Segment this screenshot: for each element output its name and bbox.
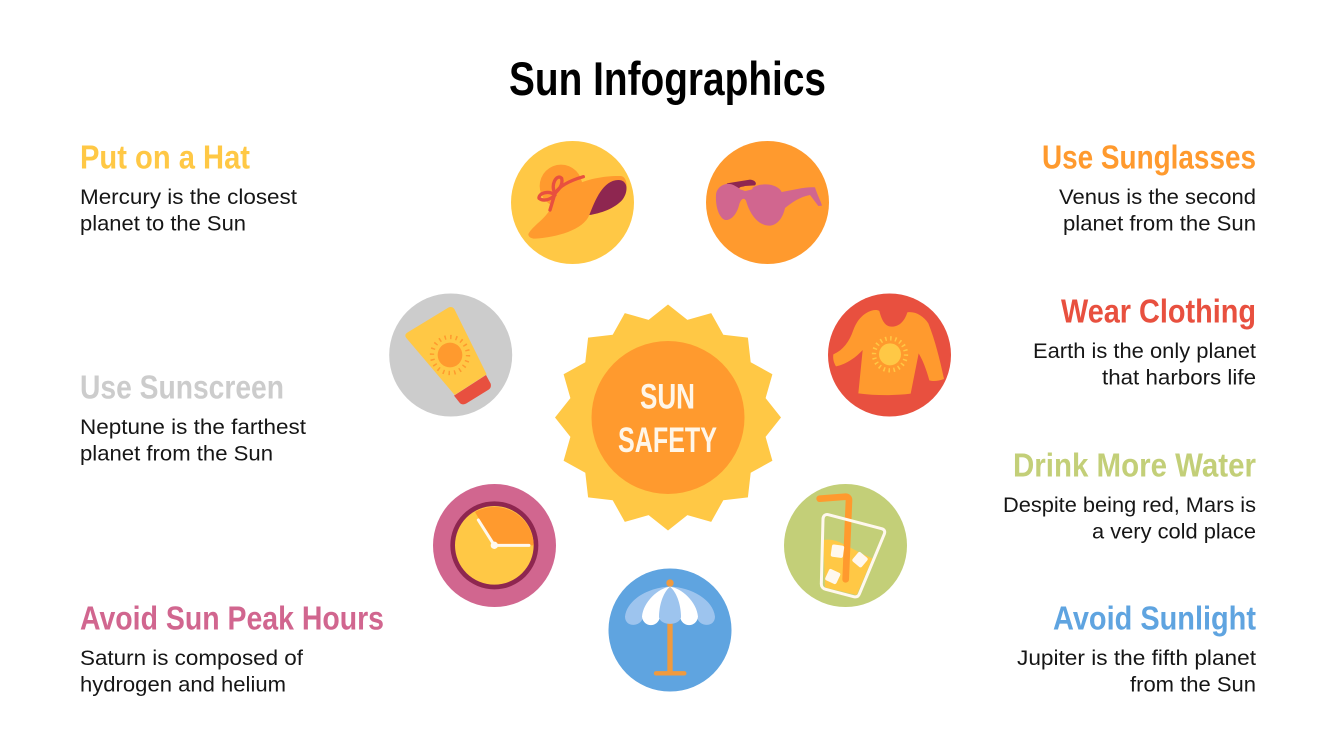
- title: Sun Infographics: [509, 52, 826, 105]
- text block: drink more water: a very cold place: [1092, 520, 1256, 544]
- text block: use sunscreen: Neptune is the farthest: [80, 416, 306, 439]
- text block: avoid sun peak hours: [80, 600, 384, 696]
- text block: use sunglasses: [1042, 138, 1256, 236]
- text block: drink more water: [1003, 446, 1256, 544]
- text block: put on a hat: [80, 138, 297, 236]
- text block: drink more water: Drink More Water: [1013, 446, 1256, 484]
- icon: sunglasses: [706, 141, 829, 264]
- text block: put on a hat: Mercury is the closest: [80, 186, 297, 209]
- text block: avoid sun peak hours: Avoid Sun Peak Hours: [80, 600, 384, 636]
- text block: use sunscreen: [80, 368, 306, 466]
- text block: wear clothing: Wear Clothing: [1061, 292, 1256, 330]
- central sun badge: SAFETY: [618, 421, 717, 460]
- text block: use sunglasses: Venus is the second: [1059, 186, 1256, 209]
- text block: wear clothing: that harbors life: [1102, 366, 1256, 390]
- text block: use sunglasses: planet from the Sun: [1063, 212, 1256, 236]
- icon: hat: [511, 141, 634, 264]
- text block: drink more water: Despite being red, Mars is: [1003, 494, 1256, 517]
- icon: drink glass: [784, 484, 907, 607]
- icon: shirt: [828, 294, 951, 416]
- text block: wear clothing: Earth is the only planet: [1033, 340, 1256, 363]
- text block: wear clothing: [1033, 292, 1256, 390]
- text block: put on a hat: Put on a Hat: [80, 138, 250, 176]
- text block: avoid sunlight: Jupiter is the fifth planet: [1017, 647, 1256, 670]
- text block: avoid sun peak hours: hydrogen and helium: [80, 674, 286, 696]
- text block: use sunscreen: Use Sunscreen: [80, 368, 284, 406]
- icon: clock: [433, 484, 556, 607]
- central sun badge: [555, 304, 781, 530]
- text block: avoid sun peak hours: Saturn is composed of: [80, 647, 303, 670]
- text block: use sunglasses: Use Sunglasses: [1042, 138, 1256, 176]
- icon: sunscreen tube: [389, 294, 512, 416]
- text block: put on a hat: planet to the Sun: [80, 212, 246, 236]
- text block: avoid sunlight: Avoid Sunlight: [1053, 600, 1256, 636]
- text block: avoid sunlight: [1017, 600, 1256, 696]
- icon: beach umbrella: [608, 568, 732, 692]
- central sun badge: SUN: [640, 378, 695, 416]
- text block: use sunscreen: planet from the Sun: [80, 442, 273, 466]
- text block: avoid sunlight: from the Sun: [1130, 674, 1256, 696]
